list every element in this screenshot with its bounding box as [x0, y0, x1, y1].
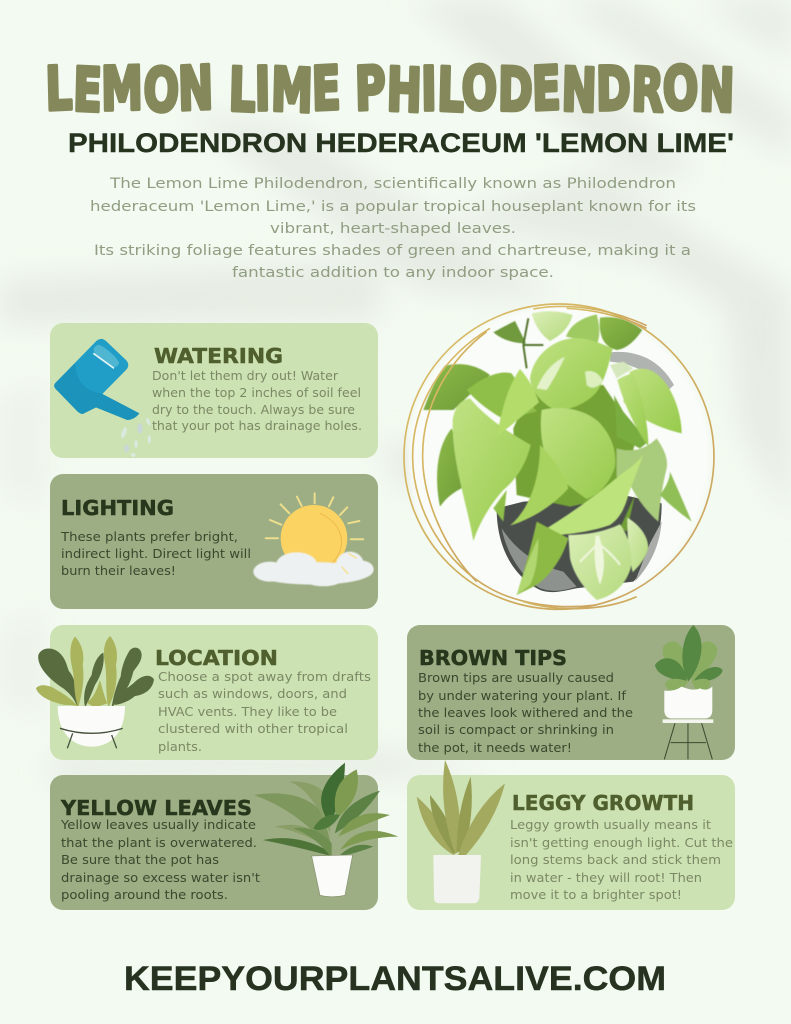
text: yellow leaves advice: Yellow leaves usually indicate: [60, 817, 256, 832]
text: location advice: clustered with other tropical: [158, 721, 348, 736]
intro paragraph: hederaceum 'Lemon Lime,' is a popular tropical houseplant known for its: [90, 198, 696, 215]
leaves: [423, 311, 692, 600]
icon: aloe plant in white pot: [417, 760, 505, 903]
heading: brown tips: BROWN TIPS: [419, 646, 567, 670]
text: yellow leaves advice: drainage so excess water isn't: [61, 870, 260, 885]
text: brown tips advice: Brown tips are usually caused: [418, 670, 614, 685]
panel: lighting: [50, 474, 378, 609]
white disc behind plant: [409, 307, 709, 607]
text: brown tips advice: by under watering your plant. If: [418, 688, 627, 703]
text: brown tips advice: the leaves look withered and the: [418, 705, 633, 720]
text: yellow leaves advice: Be sure that the pot has: [61, 852, 219, 867]
text: watering advice: that your pot has drainage holes.: [152, 418, 362, 433]
icon: plant on tall stand: [655, 625, 723, 759]
text: lighting advice: burn their leaves!: [61, 563, 176, 578]
text: watering advice: [152, 368, 362, 433]
text: leggy growth advice: in water - they will root! Then: [510, 870, 702, 885]
panel: location: [50, 625, 378, 760]
text: lighting advice: [60, 529, 251, 578]
heading: leggy growth: LEGGY GROWTH: [512, 791, 694, 815]
icon: leafy plant in white pot: [254, 763, 398, 897]
text: leggy growth advice: long stems back and stick them: [510, 852, 721, 867]
intro paragraph: [90, 175, 696, 281]
heading: lighting: LIGHTING: [61, 496, 174, 520]
text: lighting advice: These plants prefer bright,: [60, 529, 238, 544]
text: location advice: Choose a spot away from drafts: [158, 669, 371, 684]
text: leggy growth advice: [510, 817, 733, 902]
photo: potted philodendron in gold rings: [404, 304, 714, 609]
text: brown tips advice: [418, 670, 633, 755]
subtitle: PHILODENDRON HEDERACEUM 'LEMON LIME': [68, 128, 734, 158]
text: lighting advice: indirect light. Direct light will: [61, 546, 251, 561]
text: watering advice: dry to the touch. Always be sure: [152, 402, 355, 417]
text: watering advice: when the top 2 inches of soil feel: [152, 385, 361, 400]
title: LEMON LIME PHILODENDRON: [44, 54, 736, 126]
intro paragraph: Its striking foliage features shades of green and chartreuse, making it a: [94, 242, 691, 259]
gold rings: [404, 304, 714, 609]
text: yellow leaves advice: [60, 817, 260, 902]
text: leggy growth advice: Leggy growth usually means it: [510, 817, 711, 832]
text: location advice: plants.: [158, 739, 202, 754]
intro paragraph: vibrant, heart-shaped leaves.: [270, 220, 516, 237]
text: yellow leaves advice: that the plant is overwatered.: [61, 835, 257, 850]
grey pot: [497, 352, 674, 592]
footer website: KEEPYOURPLANTSALIVE.COM: [124, 960, 666, 998]
heading: location: LOCATION: [155, 646, 278, 670]
icon: watering can: [54, 339, 152, 457]
text: brown tips advice: the pot, it needs water!: [418, 740, 572, 755]
intro paragraph: The Lemon Lime Philodendron, scientifically known as Philodendron: [109, 175, 676, 192]
panel: leggy growth: [407, 775, 735, 910]
text: watering advice: Don't let them dry out! Water: [152, 368, 339, 383]
panel: brown tips: [407, 625, 735, 760]
heading: yellow leaves: YELLOW LEAVES: [60, 796, 252, 820]
panel: watering: [50, 323, 378, 458]
text: location advice: such as windows, doors, and: [158, 686, 347, 701]
text: leggy growth advice: isn't getting enough light. Cut the: [510, 835, 733, 850]
panel: yellow leaves: [50, 775, 378, 910]
icon: potted plant on stand: [36, 636, 154, 748]
intro paragraph: fantastic addition to any indoor space.: [232, 264, 554, 281]
text: yellow leaves advice: pooling around the roots.: [61, 887, 228, 902]
text: brown tips advice: soil is compact or shrinking in: [418, 722, 614, 737]
text: location advice: [158, 669, 371, 754]
text: leggy growth advice: move it to a brighter spot!: [510, 887, 682, 902]
text: location advice: HVAC vents. They like to be: [158, 704, 337, 719]
icon: sun and cloud: [253, 493, 374, 586]
heading: watering: WATERING: [154, 344, 283, 368]
